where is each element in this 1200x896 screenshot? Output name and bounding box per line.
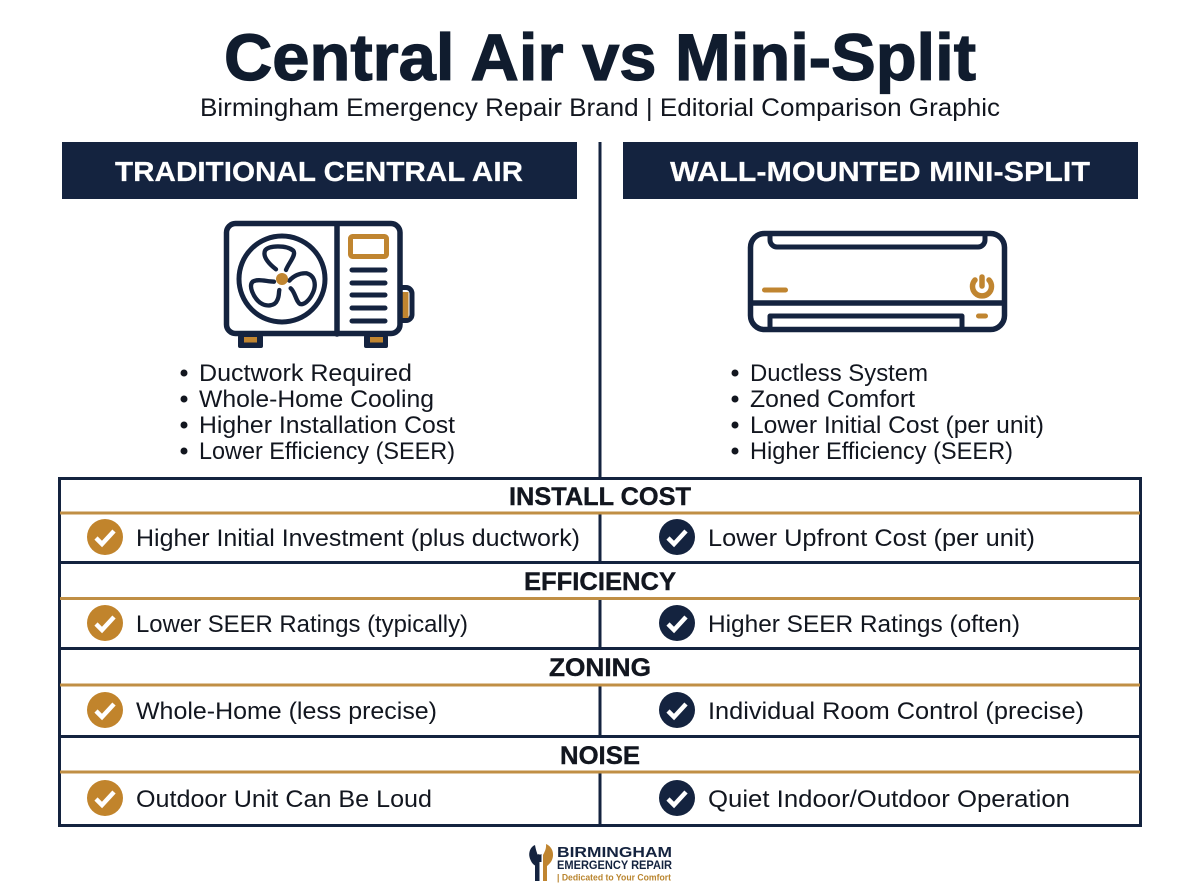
comparison table — [59, 478, 1141, 826]
row: zoning: ZONING — [549, 654, 651, 682]
row: install cost: Higher Initial Investment (plus ductwork) — [136, 525, 580, 552]
row: efficiency: Higher SEER Ratings (often) — [708, 611, 1020, 638]
left feature list — [180, 360, 455, 465]
left column header — [62, 142, 577, 199]
center divider — [598, 142, 602, 478]
left feature list: Higher Installation Cost — [199, 412, 455, 439]
row: zoning: Whole-Home (less precise) — [136, 698, 437, 725]
right column header — [623, 142, 1138, 199]
left feature list: Ductwork Required — [199, 360, 412, 387]
row: noise: Outdoor Unit Can Be Loud — [136, 786, 432, 813]
footer logo: EMERGENCY REPAIR — [557, 860, 673, 872]
left feature list: Whole-Home Cooling — [199, 386, 434, 413]
row: noise: Quiet Indoor/Outdoor Operation — [708, 786, 1070, 813]
row: efficiency: Lower SEER Ratings (typically) — [136, 611, 468, 638]
brand name: BIRMINGHAM — [557, 844, 672, 861]
title: Central Air vs Mini-Split — [224, 20, 976, 94]
row: efficiency — [87, 568, 1020, 641]
row: zoning: Individual Room Control (precise) — [708, 698, 1084, 725]
tagline: | Dedicated to Your Comfort — [557, 872, 672, 884]
subtitle: Birmingham Emergency Repair Brand | Editorial Comparison Graphic — [200, 94, 1000, 122]
left column header: TRADITIONAL CENTRAL AIR — [115, 156, 523, 187]
left feature list: Lower Efficiency (SEER) — [199, 438, 455, 465]
right feature list: Zoned Comfort — [750, 386, 915, 413]
row: install cost: Lower Upfront Cost (per unit) — [708, 525, 1035, 552]
right feature list: Ductless System — [750, 360, 928, 387]
row: zoning — [87, 654, 1084, 728]
right column header: WALL-MOUNTED MINI-SPLIT — [670, 156, 1090, 187]
row: noise — [87, 742, 1070, 816]
right feature list — [732, 360, 1044, 465]
row: install cost — [87, 483, 1035, 555]
row: noise: NOISE — [560, 742, 640, 770]
row: efficiency: EFFICIENCY — [524, 568, 676, 596]
right feature list: Higher Efficiency (SEER) — [750, 438, 1013, 465]
icon: wall-mounted mini-split — [750, 234, 1004, 330]
footer logo — [529, 844, 673, 884]
right feature list: Lower Initial Cost (per unit) — [750, 412, 1044, 439]
row: install cost: INSTALL COST — [509, 483, 691, 511]
icon: wrench logo — [529, 844, 553, 881]
icon: outdoor central air unit — [226, 224, 412, 348]
